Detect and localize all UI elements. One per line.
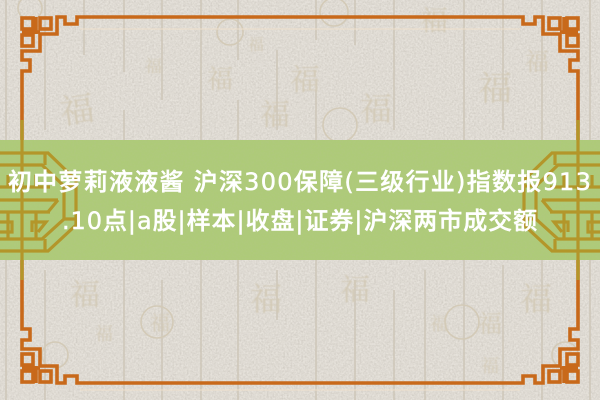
faint fu character watermark pattern: 福 [520,274,552,320]
lattice ornament right [524,120,600,280]
faint fu character watermark pattern [56,0,552,378]
faint fu character watermark pattern: 福 [481,352,499,378]
faint fu character watermark pattern: 福 [207,59,233,96]
faint fu character watermark pattern: 福 [250,274,282,320]
faint fu character watermark pattern: 福 [478,304,502,339]
title line 2: .10点|a股|样本|收盘|证券|沪深两市成交额 [62,207,538,235]
orange frame: top left corner [22,17,300,200]
title line 1: 初中萝莉液液酱 沪深300保障(三级行业)指数报913 [8,168,592,196]
faint fu character watermark pattern: 福 [95,320,113,346]
faint fu character watermark pattern: 福 [290,55,320,99]
faint fu character watermark pattern: 福 [70,270,100,314]
faint fu character watermark pattern: 福 [525,42,549,77]
faint fu character watermark pattern: 福 [260,90,290,134]
faint fu character watermark pattern: 福 [360,84,392,130]
faint fu character watermark pattern: 福 [248,32,264,55]
faint fu character watermark pattern: 福 [145,52,162,77]
faint fu character watermark pattern: 福 [478,61,512,110]
faint fu character watermark pattern: 福 [150,307,170,336]
orange frame: top right corner [300,17,578,200]
faint fu character watermark pattern: 福 [420,0,448,39]
green title band [0,140,600,260]
lattice ornament left [0,120,76,280]
band grain texture [0,140,600,260]
title text block [8,168,592,235]
faint fu character watermark pattern: 福 [340,265,370,309]
orange frame: bottom right corner [300,200,578,383]
faint inner rule lines [80,29,520,390]
faint fu character watermark pattern: 福 [56,81,97,134]
orange frame: bottom left corner [22,200,300,383]
faint fu character watermark pattern: 福 [430,310,448,336]
